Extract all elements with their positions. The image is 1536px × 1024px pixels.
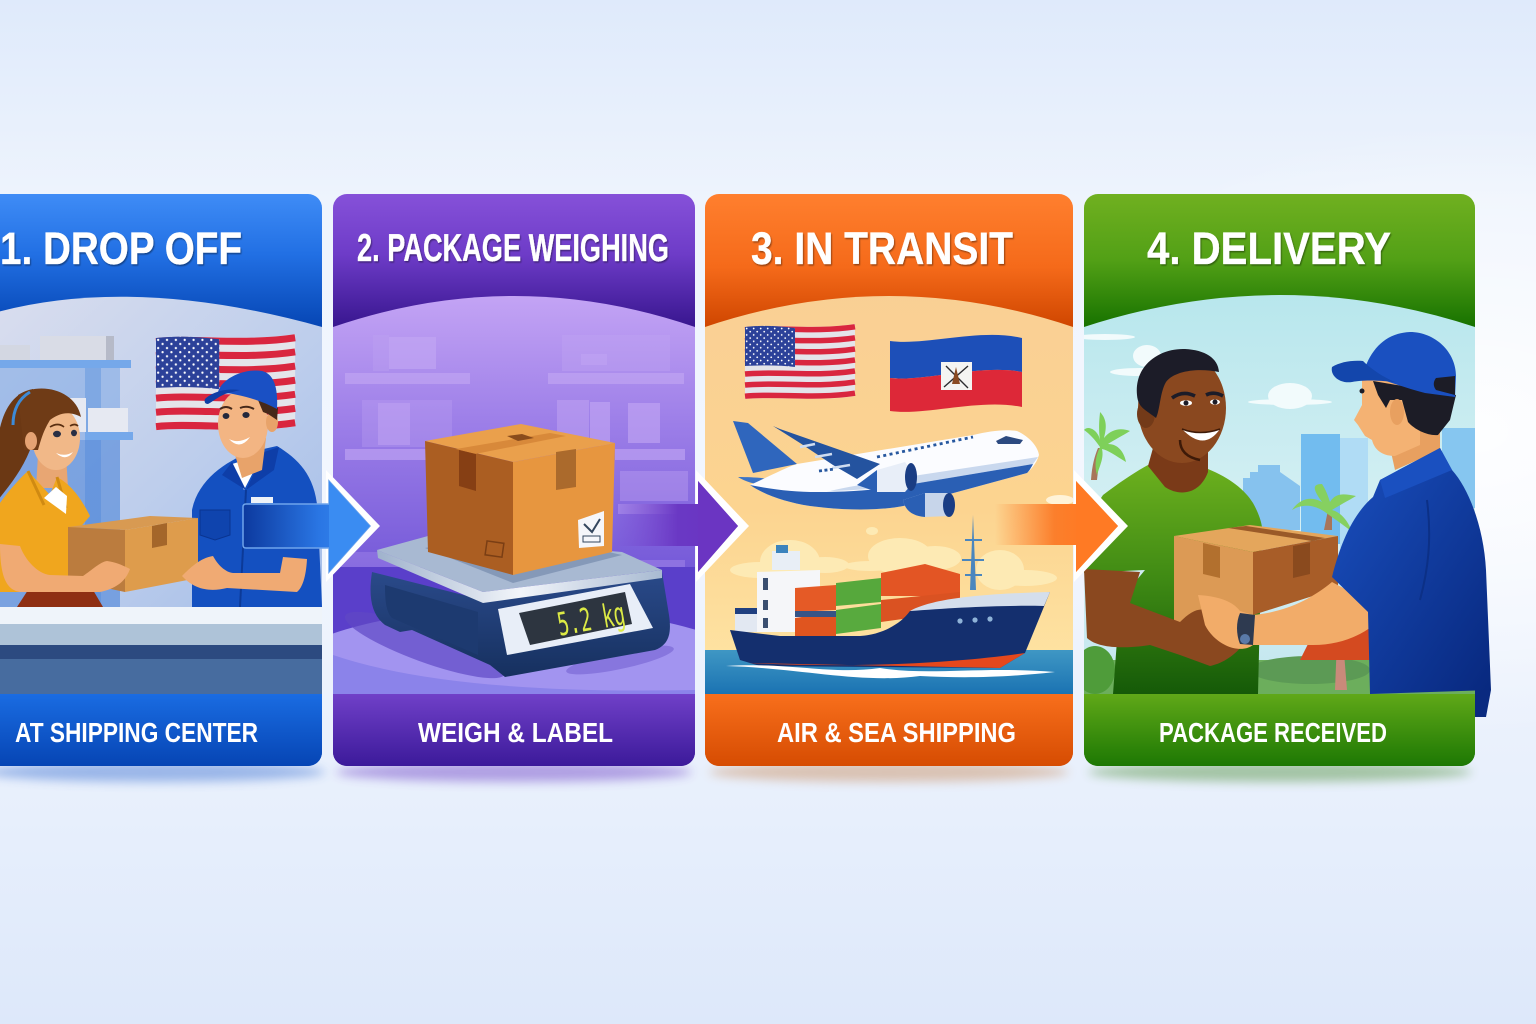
icon: us flag <box>745 324 855 399</box>
figure: male clerk <box>192 370 322 607</box>
icon: parcel held by customers <box>68 516 198 592</box>
heading: 2. package weighing: 2. PACKAGE WEIGHING <box>357 227 669 270</box>
panel: step 3 in transit <box>705 194 1074 766</box>
figure: courier arm and hand <box>1198 582 1368 649</box>
readout: 5.2 kg: 5.2 kg <box>554 594 628 644</box>
arrow: step 2 to 3 <box>615 470 749 582</box>
scene: outdoor background <box>1075 280 1476 695</box>
subheading band <box>705 694 1073 766</box>
ground foliage <box>1075 628 1475 695</box>
icon: haiti flag <box>890 335 1022 412</box>
subheading band <box>0 694 322 766</box>
scene: shipping center <box>0 280 322 695</box>
figure: woman customer <box>0 388 103 607</box>
panel: step 1 drop off <box>0 194 322 766</box>
heading: 3. in transit: 3. IN TRANSIT <box>751 223 1013 274</box>
figure: customer arm <box>1084 569 1243 666</box>
heading: 4. delivery: 4. DELIVERY <box>1147 223 1391 274</box>
icon: us flag <box>156 334 295 430</box>
floor platform <box>333 567 695 694</box>
icon: parcel on scale <box>425 424 615 575</box>
arrow: step 1 to 2 <box>243 470 380 582</box>
panel: step 4 delivery <box>1075 194 1491 766</box>
figure: arms and hands <box>0 544 307 592</box>
icon: airplane <box>733 421 1039 517</box>
subheading band <box>333 694 695 766</box>
buildings <box>1243 428 1476 548</box>
caption: weigh and label: WEIGH & LABEL <box>418 717 613 748</box>
panel: step 2 package weighing <box>333 194 695 766</box>
caption: package received: PACKAGE RECEIVED <box>1159 717 1387 748</box>
icon: digital scale <box>371 530 670 677</box>
clouds <box>730 495 1074 590</box>
icon: parcel being delivered <box>1174 525 1338 625</box>
shelves in background <box>340 335 688 577</box>
card shadows <box>0 762 1472 782</box>
caption: at shipping center: AT SHIPPING CENTER <box>15 717 258 748</box>
figure: customer in green shirt <box>1084 349 1262 694</box>
subheading band <box>1084 694 1475 766</box>
shelves <box>0 336 133 610</box>
sea <box>705 650 1073 695</box>
arrow: step 3 to 4 <box>995 470 1128 582</box>
icon: palm trees <box>1084 412 1356 532</box>
scene: weighing room <box>333 296 695 694</box>
heading: 1. drop off: 1. DROP OFF <box>0 223 242 274</box>
counter <box>0 607 322 695</box>
caption: air and sea shipping: AIR & SEA SHIPPING <box>777 717 1016 748</box>
figure: courier in blue <box>1332 332 1491 717</box>
scene: air and sea <box>705 280 1074 695</box>
icon: container ship <box>726 515 1055 678</box>
clouds <box>1075 334 1332 409</box>
